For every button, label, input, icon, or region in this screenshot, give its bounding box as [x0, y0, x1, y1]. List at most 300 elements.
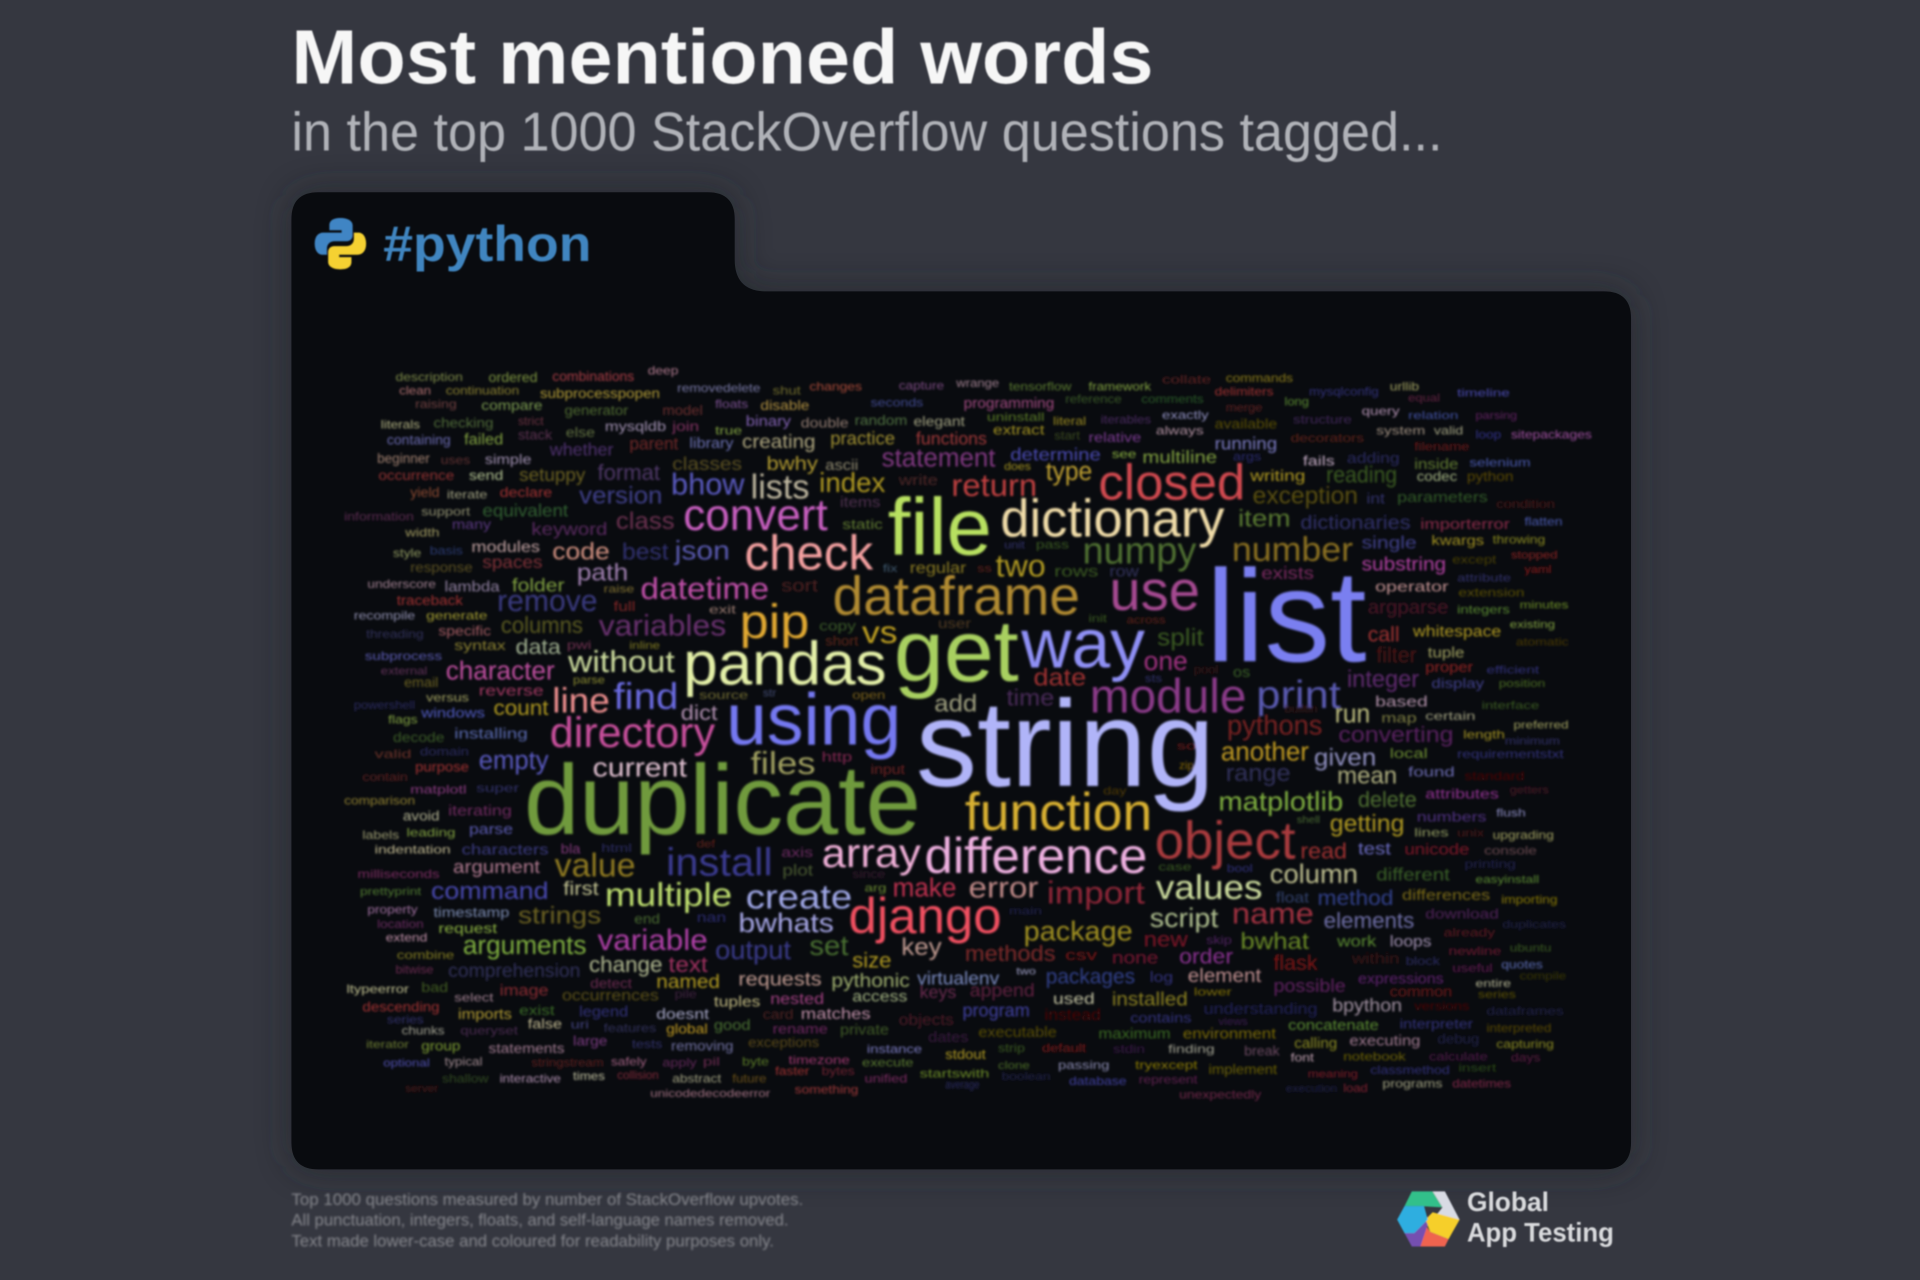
medium and small words: possible	[1273, 975, 1346, 996]
medium and small words: one	[1144, 646, 1188, 676]
medium and small words: exists	[1261, 563, 1314, 583]
medium and small words: stdout	[945, 1047, 986, 1062]
medium and small words: selenium	[1469, 456, 1531, 470]
medium and small words: raise	[604, 584, 634, 596]
medium and small words: path	[577, 559, 628, 586]
medium and small words: always	[1156, 424, 1204, 438]
medium and small words: element	[1188, 965, 1262, 987]
medium and small words: typical	[444, 1054, 482, 1068]
medium and small words: source	[699, 688, 748, 702]
word: duplicate: duplicate	[524, 745, 921, 856]
medium and small words: whether	[549, 440, 614, 460]
medium and small words: determine	[1010, 444, 1101, 464]
medium and small words: end	[634, 911, 660, 926]
medium and small words: unicode	[1404, 842, 1470, 859]
medium and small words: delimiters	[1215, 385, 1273, 399]
medium and small words: float	[1276, 890, 1309, 906]
medium and small words: false	[528, 1017, 562, 1032]
medium and small words: append	[970, 980, 1035, 1001]
medium and small words: bhow	[671, 468, 745, 502]
word: difference: difference	[924, 828, 1147, 884]
medium and small words: mean	[1337, 763, 1397, 790]
medium and small words: rename	[773, 1021, 828, 1036]
medium and small words: views	[1218, 1016, 1248, 1028]
medium and small words: exactly	[1162, 408, 1210, 422]
medium and small words: reading	[1326, 461, 1397, 487]
medium and small words: value	[555, 848, 636, 885]
medium and small words: versions	[1414, 999, 1469, 1013]
medium and small words: across	[1127, 614, 1166, 626]
medium and small words: another	[1221, 738, 1309, 766]
medium and small words: different	[1376, 864, 1450, 884]
medium and small words: framework	[1089, 380, 1152, 394]
medium and small words: virtualenv	[917, 967, 1000, 988]
footnote: Top 1000 questions measured by number of StackOverflow upvotes.	[291, 1190, 803, 1209]
medium and small words: server	[405, 1083, 439, 1095]
medium and small words: user	[938, 616, 972, 631]
medium and small words: order	[1179, 946, 1233, 969]
medium and small words: str	[763, 688, 777, 700]
medium and small words: features	[604, 1021, 656, 1035]
medium and small words: subprocess	[365, 649, 442, 663]
medium and small words: bitwise	[396, 962, 434, 976]
medium and small words: true	[715, 424, 742, 438]
medium and small words: yaml	[1524, 564, 1551, 576]
medium and small words: throwing	[1493, 533, 1546, 547]
medium and small words: code	[552, 539, 610, 566]
medium and small words: apply	[662, 1056, 698, 1070]
medium and small words: stdin	[1113, 1042, 1145, 1056]
medium and small words: printing	[1464, 857, 1516, 871]
medium and small words: count	[493, 697, 549, 720]
word: function: function	[965, 783, 1152, 842]
medium and small words: adding	[1347, 451, 1400, 467]
medium and small words: skip	[1206, 933, 1232, 947]
medium and small words: exceptions	[748, 1035, 819, 1050]
word: get: get	[894, 603, 1019, 700]
word cloud	[344, 364, 1592, 1101]
medium and small words: block	[1406, 954, 1441, 968]
medium and small words: combine	[397, 948, 455, 962]
medium and small words: environment	[1183, 1026, 1276, 1042]
medium and small words: doesnt	[656, 1007, 709, 1023]
medium and small words: finding	[1168, 1042, 1215, 1056]
medium and small words: csv	[1065, 948, 1098, 964]
medium and small words: indentation	[375, 842, 451, 856]
medium and small words: database	[1069, 1074, 1127, 1088]
medium and small words: mysqlconfig	[1309, 385, 1379, 399]
medium and small words: comments	[1141, 392, 1204, 406]
logo text: App Testing	[1467, 1218, 1614, 1248]
medium and small words: return	[951, 467, 1037, 503]
medium and small words: main	[1009, 906, 1042, 918]
word: file: file	[888, 483, 992, 573]
medium and small words: syntax	[454, 638, 506, 653]
footnote: All punctuation, integers, floats, and self-language names removed.	[291, 1211, 789, 1230]
medium and small words: tryexcept	[1135, 1058, 1198, 1072]
medium and small words: class	[616, 508, 675, 535]
medium and small words: generator	[564, 403, 629, 418]
medium and small words: property	[367, 902, 419, 916]
medium and small words: static	[842, 517, 883, 532]
medium and small words: write	[898, 473, 938, 489]
medium and small words: flush	[1496, 808, 1526, 820]
medium and small words: short	[825, 633, 859, 648]
medium and small words: reverse	[479, 684, 544, 700]
word: django: django	[849, 888, 1002, 944]
medium and small words: commands	[1226, 371, 1293, 385]
medium and small words: relative	[1089, 430, 1141, 445]
medium and small words: contains	[1130, 1010, 1192, 1025]
medium and small words: programs	[1382, 1076, 1442, 1090]
medium and small words: date	[1033, 665, 1086, 692]
medium and small words: fails	[1303, 453, 1335, 468]
medium and small words: dict	[681, 702, 718, 725]
medium and small words: pip	[740, 596, 809, 649]
medium and small words: parsing	[1476, 410, 1517, 422]
medium and small words: mysqldb	[605, 419, 666, 434]
medium and small words: multiple	[605, 877, 732, 914]
medium and small words: literals	[381, 418, 420, 432]
medium and small words: none	[1112, 948, 1158, 968]
medium and small words: domain	[420, 745, 469, 759]
medium and small words: character	[446, 658, 555, 686]
medium and small words: deep	[648, 364, 679, 378]
medium and small words: continuation	[446, 383, 519, 397]
medium and small words: floats	[715, 397, 748, 411]
medium and small words: newline	[1449, 944, 1501, 958]
medium and small words: flags	[388, 713, 418, 727]
medium and small words: duplicates	[1502, 919, 1567, 931]
medium and small words: comparison	[344, 793, 415, 807]
medium and small words: numbers	[1417, 810, 1487, 825]
medium and small words: within	[1351, 952, 1400, 968]
medium and small words: uses	[441, 453, 470, 467]
medium and small words: windows	[420, 706, 485, 721]
medium and small words: named	[656, 971, 720, 993]
medium and small words: exception	[1253, 482, 1358, 509]
medium and small words: insert	[1458, 1062, 1496, 1074]
medium and small words: byte	[742, 1054, 769, 1068]
medium and small words: comprehension	[448, 960, 580, 982]
medium and small words: removing	[671, 1039, 733, 1054]
medium and small words: install	[666, 842, 773, 885]
medium and small words: calling	[1294, 1036, 1337, 1052]
medium and small words: work	[1336, 934, 1376, 951]
medium and small words: tests	[632, 1037, 662, 1051]
medium and small words: global	[666, 1021, 708, 1036]
word: convert: convert	[683, 491, 828, 540]
medium and small words: setuppy	[519, 464, 586, 485]
medium and small words: test	[1358, 839, 1391, 859]
medium and small words: combinations	[552, 369, 635, 384]
word: closed: closed	[1098, 455, 1245, 511]
medium and small words: leading	[407, 825, 456, 839]
medium and small words: threading	[366, 627, 424, 641]
medium and small words: default	[1042, 1041, 1087, 1055]
medium and small words: split	[1157, 624, 1204, 651]
medium and small words: imports	[458, 1007, 512, 1023]
medium and small words: request	[438, 921, 497, 936]
medium and small words: package	[1024, 915, 1133, 946]
word: directory: directory	[550, 709, 716, 757]
medium and small words: instance	[867, 1042, 922, 1056]
medium and small words: integers	[1457, 602, 1510, 616]
medium and small words: writing	[1249, 468, 1305, 485]
medium and small words: substring	[1362, 554, 1446, 576]
medium and small words: traceback	[397, 593, 463, 608]
medium and small words: read	[1300, 838, 1347, 863]
medium and small words: standard	[1464, 769, 1525, 783]
medium and small words: since	[852, 867, 886, 881]
medium and small words: strict	[518, 414, 544, 428]
medium and small words: find	[613, 676, 678, 717]
medium and small words: datetimes	[1452, 1076, 1511, 1090]
medium and small words: decorators	[1291, 431, 1364, 445]
medium and small words: occurrence	[378, 468, 454, 483]
medium and small words: occurrences	[562, 987, 659, 1004]
medium and small words: data	[516, 636, 561, 659]
medium and small words: folder	[512, 574, 564, 595]
medium and small words: response	[410, 560, 473, 575]
medium and small words: variables	[599, 610, 726, 643]
medium and small words: subprocesspopen	[540, 386, 660, 401]
medium and small words: case	[1158, 862, 1191, 874]
medium and small words: html	[601, 841, 632, 855]
medium and small words: font	[1291, 1051, 1315, 1065]
icon: python logo	[315, 218, 366, 269]
medium and small words: index	[819, 467, 885, 498]
medium and small words: execute	[862, 1056, 914, 1070]
medium and small words: yield	[410, 485, 440, 500]
medium and small words: multiline	[1142, 447, 1217, 467]
medium and small words: operator	[1375, 579, 1449, 595]
medium and small words: lines	[1414, 825, 1449, 839]
medium and small words: detect	[590, 976, 632, 991]
medium and small words: script	[1150, 903, 1219, 933]
medium and small words: extract	[993, 423, 1045, 438]
medium and small words: importing	[1501, 893, 1558, 907]
medium and small words: input	[871, 762, 905, 777]
medium and small words: shallow	[442, 1071, 489, 1085]
medium and small words: capture	[899, 378, 944, 392]
medium and small words: size	[852, 949, 891, 972]
medium and small words: dictionaries	[1300, 512, 1411, 534]
medium and small words: unix	[1457, 827, 1485, 839]
medium and small words: classes	[672, 453, 742, 474]
medium and small words: location	[377, 917, 424, 931]
medium and small words: query	[1362, 404, 1401, 418]
medium and small words: two	[996, 548, 1046, 584]
medium and small words: objects	[899, 1012, 954, 1029]
medium and small words: already	[1444, 926, 1496, 940]
medium and small words: error	[969, 872, 1039, 905]
medium and small words: width	[404, 525, 440, 539]
medium and small words: strings	[518, 902, 601, 929]
medium and small words: pool	[1194, 662, 1218, 676]
medium and small words: urllib	[1390, 380, 1419, 394]
medium and small words: installing	[454, 726, 528, 742]
medium and small words: useful	[1452, 961, 1493, 975]
medium and small words: passing	[1058, 1058, 1110, 1072]
medium and small words: output	[715, 935, 792, 965]
footnote: Text made lower-case and coloured for readability purposes only.	[291, 1232, 774, 1251]
medium and small words: text	[669, 952, 708, 977]
medium and small words: efficient	[1487, 664, 1539, 676]
medium and small words: attribute	[1457, 573, 1511, 585]
medium and small words: log	[1150, 970, 1173, 986]
medium and small words: add	[934, 690, 977, 717]
medium and small words: break	[1244, 1044, 1280, 1059]
medium and small words: regular	[910, 560, 967, 577]
medium and small words: bpython	[1332, 994, 1402, 1015]
medium and small words: item	[1238, 506, 1291, 533]
medium and small words: valid	[1434, 424, 1463, 438]
medium and small words: chunks	[402, 1024, 444, 1038]
medium and small words: range	[1226, 760, 1291, 787]
medium and small words: concatenate	[1288, 1018, 1379, 1034]
medium and small words: elements	[1324, 908, 1414, 933]
medium and small words: print	[1256, 674, 1341, 717]
medium and small words: timezone	[789, 1053, 850, 1067]
medium and small words: remove	[497, 584, 598, 618]
medium and small words: labels	[362, 828, 399, 842]
medium and small words: iterate	[447, 487, 488, 501]
word: dictionary: dictionary	[1000, 489, 1225, 548]
medium and small words: column	[1270, 859, 1358, 889]
medium and small words: command	[431, 878, 549, 905]
medium and small words: send	[469, 468, 503, 483]
medium and small words: implement	[1209, 1062, 1277, 1077]
medium and small words: atomatic	[1516, 636, 1569, 648]
medium and small words: group	[421, 1039, 460, 1054]
medium and small words: shut	[773, 383, 802, 397]
medium and small words: ltypeerror	[347, 982, 409, 996]
medium and small words: import	[1047, 875, 1145, 911]
medium and small words: parent	[629, 433, 679, 453]
medium and small words: importerror	[1420, 517, 1510, 533]
word: dataframe: dataframe	[833, 565, 1080, 627]
medium and small words: kwargs	[1431, 533, 1484, 548]
medium and small words: description	[396, 370, 463, 384]
medium and small words: statement	[882, 445, 996, 473]
medium and small words: inside	[1414, 457, 1458, 473]
medium and small words: requirementstxt	[1457, 747, 1564, 761]
medium and small words: arg	[864, 882, 887, 894]
medium and small words: legend	[579, 1004, 628, 1020]
medium and small words: series	[387, 1013, 424, 1027]
medium and small words: def	[697, 838, 716, 850]
medium and small words: vs	[862, 614, 898, 650]
medium and small words: timeline	[1457, 388, 1510, 400]
medium and small words: series	[1478, 989, 1517, 1001]
medium and small words: abstract	[672, 1071, 722, 1085]
medium and small words: run	[1335, 700, 1370, 728]
medium and small words: execution	[1286, 1083, 1337, 1095]
medium and small words: quotes	[1501, 958, 1543, 972]
medium and small words: lists	[751, 468, 809, 506]
medium and small words: capturing	[1496, 1037, 1554, 1051]
medium and small words: local	[1390, 746, 1428, 761]
medium and small words: except	[1452, 552, 1497, 566]
medium and small words: exit	[709, 602, 737, 616]
medium and small words: something	[795, 1082, 859, 1096]
medium and small words: milliseconds	[358, 867, 440, 881]
medium and small words: relation	[1408, 410, 1458, 422]
medium and small words: stopped	[1511, 549, 1558, 561]
medium and small words: new	[1144, 929, 1189, 952]
medium and small words: interactive	[500, 1071, 561, 1085]
medium and small words: structure	[1293, 413, 1352, 427]
medium and small words	[344, 364, 1592, 1101]
medium and small words: dataframes	[1487, 1004, 1564, 1018]
medium and small words: start	[1054, 429, 1081, 443]
medium and small words: call	[1368, 624, 1400, 647]
panel shadow	[291, 192, 1631, 1169]
medium and small words: lower	[1194, 987, 1232, 999]
medium and small words: tensorflow	[1009, 380, 1072, 394]
medium and small words: equivalent	[482, 501, 568, 521]
medium and small words: bwhy	[767, 453, 818, 475]
medium and small words: unified	[864, 1071, 908, 1085]
medium and small words: matplotlib	[1218, 787, 1343, 817]
medium and small words: basis	[430, 544, 463, 558]
medium and small words: without	[567, 645, 675, 679]
medium and small words: minimum	[1505, 735, 1560, 747]
medium and small words: clean	[399, 383, 431, 397]
medium and small words: uninstall	[987, 410, 1044, 424]
heading: #python: #python	[383, 216, 591, 272]
medium and small words: iterating	[448, 804, 512, 820]
medium and small words: make	[893, 874, 956, 902]
medium and small words: versus	[426, 691, 469, 705]
medium and small words: flask	[1273, 952, 1318, 975]
medium and small words: many	[452, 517, 491, 532]
medium and small words: running	[1215, 433, 1277, 453]
medium and small words: classmethod	[1370, 1063, 1450, 1077]
medium and small words: prettyprint	[360, 886, 421, 898]
medium and small words: calculate	[1429, 1049, 1488, 1063]
medium and small words: clone	[998, 1060, 1030, 1072]
medium and small words: wrange	[955, 376, 999, 390]
medium and small words: faster	[775, 1064, 809, 1078]
word: use: use	[1109, 559, 1200, 622]
medium and small words: arguments	[463, 932, 587, 960]
medium and small words: shell	[1297, 815, 1320, 826]
medium and small words: bad	[421, 980, 448, 995]
medium and small words: compile	[1520, 971, 1566, 983]
medium and small words: interpreted	[1487, 1021, 1552, 1035]
medium and small words: getting	[1330, 810, 1404, 837]
medium and small words: getters	[1510, 784, 1550, 796]
medium and small words: system	[1376, 424, 1425, 438]
medium and small words: keyword	[531, 519, 607, 539]
medium and small words: method	[1318, 887, 1393, 910]
medium and small words: easyinstall	[1476, 874, 1539, 886]
medium and small words: bool	[1227, 863, 1253, 875]
medium and small words: parse	[573, 674, 605, 686]
medium and small words: seconds	[871, 396, 923, 410]
medium and small words: keys	[920, 982, 956, 1002]
medium and small words: console	[1484, 844, 1537, 858]
medium and small words: boolean	[1002, 1071, 1051, 1083]
medium and small words: raising	[415, 397, 457, 411]
medium and small words: inline	[629, 640, 660, 652]
medium and small words: access	[852, 989, 907, 1006]
medium and small words: does	[1004, 461, 1032, 473]
medium and small words: bytes	[822, 1064, 855, 1078]
subtitle: in the top 1000 StackOverflow questions tagged...	[291, 101, 1442, 163]
